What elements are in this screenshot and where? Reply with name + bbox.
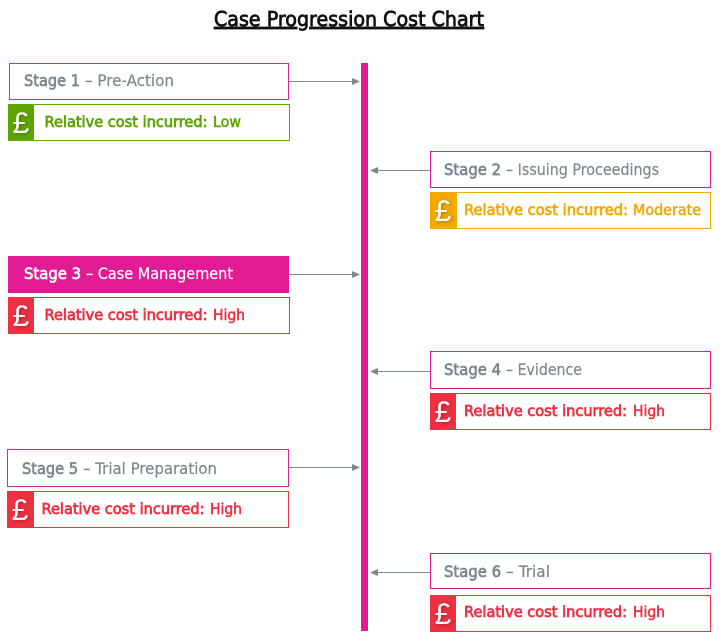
- cost box: high: [430, 393, 710, 430]
- cost box: high: £: [435, 396, 452, 429]
- timeline bar: [361, 63, 368, 631]
- stage 2: [370, 152, 710, 229]
- stage 6: [370, 554, 710, 632]
- stage 4 label box: Stage 4: [444, 360, 501, 379]
- cost box: high: [7, 491, 288, 528]
- cost box: high: [8, 297, 290, 334]
- stage 1 label box: Stage 1: [24, 71, 80, 90]
- arrow: stage 5 to timeline: [289, 464, 360, 471]
- arrow: stage 1 to timeline: [289, 78, 360, 85]
- stage 6 label box: – Trial: [506, 562, 550, 581]
- stage 2 label box: – Issuing Proceedings: [506, 160, 659, 179]
- cost box: high: [430, 595, 710, 632]
- stage 3 label box (highlighted): Stage 3: [24, 264, 81, 283]
- cost box: high: High: [633, 402, 665, 420]
- stage 3 label box (highlighted): – Case Management: [86, 264, 233, 283]
- cost box: high: High: [213, 306, 245, 324]
- stage 3: [8, 256, 360, 334]
- arrow: stage 6 to timeline: [370, 569, 430, 576]
- title: Case Progression Cost Chart: [214, 7, 484, 31]
- stage 5 label box: [8, 450, 288, 486]
- cost box: high: Relative cost incurred:: [464, 402, 627, 420]
- stage 5 label box: Stage 5: [22, 459, 78, 478]
- cost box: low: Low: [213, 113, 241, 131]
- cost box: high: Relative cost incurred:: [464, 603, 627, 621]
- stage 6 label box: Stage 6: [444, 562, 501, 581]
- cost box: high: £: [435, 598, 452, 631]
- cost box: moderate: [430, 192, 710, 229]
- cost box: low: [8, 104, 290, 141]
- cost box: high: Relative cost incurred:: [44, 306, 208, 324]
- stage 5 label box: – Trial Preparation: [83, 459, 217, 478]
- cost box: high: Relative cost incurred:: [42, 500, 204, 518]
- cost box: high: £: [12, 494, 29, 527]
- cost box: high: £: [13, 300, 30, 333]
- stage 4 label box: [430, 352, 710, 388]
- cost box: high: High: [633, 603, 665, 621]
- arrow: stage 4 to timeline: [370, 368, 430, 375]
- stage 3 label box (highlighted): [8, 256, 289, 293]
- stage 1 label box: [10, 64, 288, 100]
- cost box: moderate: Moderate: [633, 201, 701, 219]
- stage 1 label box: – Pre-Action: [85, 71, 174, 90]
- stage 4 label box: – Evidence: [506, 360, 582, 379]
- arrow: stage 3 to timeline: [289, 271, 360, 278]
- cost box: moderate: Relative cost incurred:: [464, 201, 628, 219]
- cost box: low: Relative cost incurred:: [44, 113, 208, 131]
- cost box: high: High: [210, 500, 242, 518]
- stage 4: [370, 352, 710, 430]
- cost box: moderate: £: [435, 195, 452, 228]
- cost box: low: £: [13, 107, 30, 140]
- stage 5: [7, 450, 360, 528]
- arrow: stage 2 to timeline: [370, 167, 430, 174]
- stage 6 label box: [430, 554, 710, 588]
- stage 1: [8, 64, 360, 141]
- stage 2 label box: Stage 2: [444, 160, 501, 179]
- stage 2 label box: [430, 152, 710, 188]
